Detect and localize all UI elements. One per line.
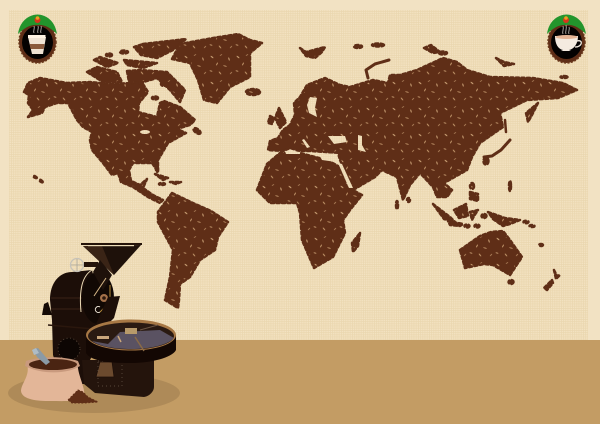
table surface bbox=[0, 340, 600, 424]
Canadian Arctic islands bbox=[87, 39, 186, 102]
inland seas bbox=[140, 97, 366, 188]
Australia bbox=[460, 231, 522, 275]
side handle bbox=[42, 302, 52, 315]
Caspian Sea bbox=[358, 135, 366, 152]
Greenland bbox=[172, 34, 262, 103]
Sri Lanka bbox=[407, 198, 410, 202]
base door bbox=[96, 362, 114, 377]
Great Lakes bbox=[140, 130, 150, 134]
United Kingdom and Ireland bbox=[268, 108, 286, 128]
metal scoop bbox=[33, 348, 50, 365]
Madagascar bbox=[352, 233, 360, 252]
Eastern Mediterranean bbox=[318, 153, 338, 162]
Baltic Sea bbox=[307, 97, 317, 117]
badge black medallion bbox=[551, 26, 582, 59]
badge: takeaway coffee bbox=[18, 14, 57, 63]
Novaya Zemlya bbox=[366, 60, 389, 78]
cooling tray bbox=[86, 320, 176, 363]
badge bead ring bbox=[548, 21, 585, 63]
disc hub bbox=[95, 285, 110, 312]
Maldives bbox=[396, 201, 398, 209]
sack coffee beans bbox=[29, 359, 77, 370]
Kamchatka bbox=[526, 103, 538, 122]
icon: takeaway cup bbox=[28, 26, 46, 54]
Sakhalin and Japan bbox=[484, 120, 510, 164]
badge bead ring bbox=[19, 21, 56, 63]
Iceland bbox=[246, 89, 260, 95]
badge flower bbox=[34, 16, 40, 23]
rear rod bbox=[48, 325, 105, 330]
coffee sack bbox=[21, 348, 84, 401]
Black Sea bbox=[328, 136, 347, 144]
badge green leaves bbox=[18, 14, 57, 34]
spilled bean pile bbox=[68, 390, 98, 403]
woven grid wall panel bbox=[9, 10, 588, 340]
South America bbox=[158, 193, 228, 308]
hopper bbox=[81, 243, 142, 296]
icon: teacup bbox=[555, 25, 581, 51]
Arctic islets bbox=[354, 44, 568, 78]
Svalbard bbox=[300, 47, 325, 58]
Western Mediterranean bbox=[285, 151, 300, 154]
cream trim bbox=[80, 270, 92, 312]
Red Sea bbox=[338, 163, 353, 188]
valve wheel bbox=[70, 258, 98, 272]
table shadow bbox=[8, 373, 180, 413]
Philippines and Taiwan bbox=[470, 181, 511, 201]
badge: coffee cup bbox=[547, 14, 586, 63]
Eurasia bbox=[268, 58, 577, 200]
disc chute bbox=[96, 296, 120, 326]
badge black medallion bbox=[22, 26, 53, 59]
badge flower bbox=[563, 16, 569, 23]
drum front disc bbox=[82, 272, 114, 324]
Africa bbox=[257, 153, 362, 268]
Tasmania bbox=[508, 280, 514, 284]
New Zealand bbox=[539, 244, 560, 290]
world map made of coffee beans bbox=[24, 34, 577, 308]
rivet circle bbox=[58, 338, 80, 360]
drum bands bbox=[51, 298, 82, 309]
badge green leaves bbox=[547, 14, 586, 34]
Adriatic bbox=[302, 139, 310, 148]
North and Central America bbox=[24, 78, 195, 203]
Indonesia bbox=[433, 204, 534, 228]
Hawaii bbox=[33, 176, 43, 183]
coffee roaster machine bbox=[42, 243, 176, 397]
base rivets bbox=[98, 361, 122, 386]
roaster base bbox=[82, 360, 154, 397]
Newfoundland bbox=[193, 127, 201, 135]
Caribbean islands bbox=[155, 166, 181, 185]
roaster drum body bbox=[50, 270, 105, 384]
